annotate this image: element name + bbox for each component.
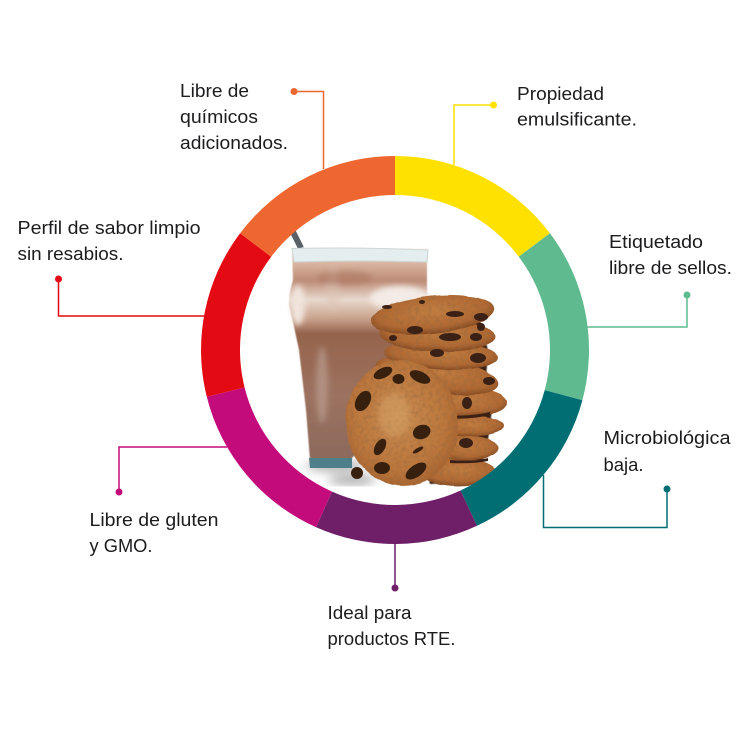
- callout: Ideal para productos RTE: [328, 543, 456, 649]
- photo: chocolate milkshake and cookies: [289, 232, 507, 492]
- label text: químicos: [180, 106, 258, 127]
- golden highlight on the front cookie: [378, 393, 410, 437]
- front cookie: [340, 354, 464, 492]
- callout: Etiquetado libre de sellos: [587, 231, 732, 327]
- segment: teal: [460, 390, 582, 526]
- label text: Libre de gluten: [90, 509, 218, 530]
- connector: red: [55, 276, 205, 316]
- callout: Libre de químicos adicionados: [180, 80, 324, 169]
- rim: [292, 248, 428, 262]
- callout: Perfil de sabor limpio sin resabios: [18, 217, 206, 316]
- pale foam patches: [291, 268, 430, 423]
- connector: magenta: [116, 447, 227, 496]
- segment: magenta: [207, 388, 332, 527]
- label text: sin resabios.: [18, 243, 124, 264]
- glass of chocolate milk: [289, 248, 430, 468]
- drinking straw: [293, 232, 310, 262]
- connector: green: [587, 292, 690, 327]
- connector: purple: [392, 543, 398, 592]
- segment: orange: [240, 156, 395, 257]
- label text: baja.: [604, 454, 644, 475]
- label text: emulsificante.: [517, 108, 637, 130]
- glass base: [309, 458, 352, 468]
- chocolate chips on the front cookie: [351, 364, 433, 483]
- connector: teal: [544, 475, 670, 528]
- dark gaps behind the stack: [390, 320, 492, 484]
- segment: green: [519, 233, 589, 400]
- label text: productos RTE.: [328, 628, 456, 649]
- floor shadow: [305, 461, 376, 484]
- label text: Ideal para: [328, 602, 412, 623]
- label text: adicionados.: [180, 132, 288, 153]
- callout: Libre de gluten y GMO: [90, 447, 227, 556]
- callout: Propiedad emulsificante: [454, 83, 637, 165]
- label text: Perfil de sabor limpio: [18, 217, 200, 238]
- label text: Etiquetado: [609, 231, 703, 252]
- label text: Libre de: [180, 80, 249, 101]
- segment: yellow: [395, 156, 550, 257]
- connector: orange: [290, 88, 324, 169]
- chocolate chips on the stack: [382, 300, 495, 463]
- connector: yellow: [454, 102, 497, 165]
- label text: Microbiológica: [604, 427, 731, 448]
- label text: Propiedad: [517, 83, 604, 104]
- colored ring: [201, 156, 589, 544]
- segment: purple: [316, 490, 477, 544]
- label text: y GMO.: [90, 535, 152, 556]
- stack of cookies: [340, 290, 507, 492]
- segment: red: [201, 233, 271, 397]
- callout: Microbiológica baja: [544, 427, 736, 528]
- label text: libre de sellos.: [609, 257, 732, 278]
